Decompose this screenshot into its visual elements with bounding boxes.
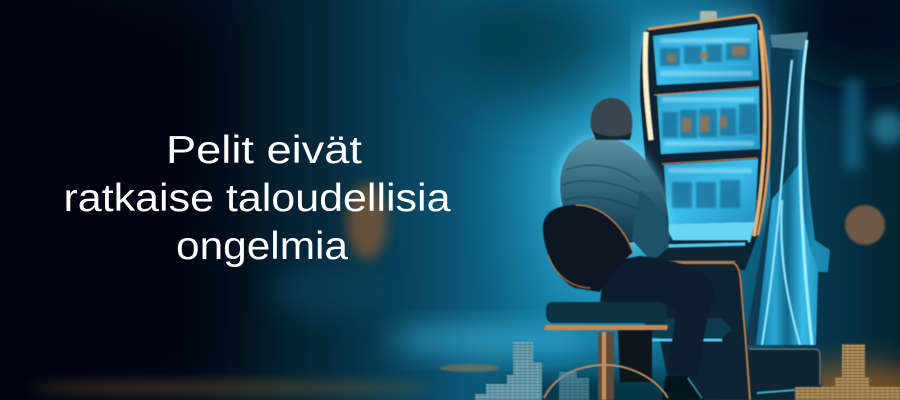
rim glow	[558, 136, 669, 245]
chip stacks	[475, 342, 900, 400]
screen details	[660, 42, 757, 208]
stool seat	[546, 302, 667, 323]
stool foot ring	[544, 365, 668, 398]
head	[591, 98, 632, 138]
gold frame edges	[648, 15, 770, 235]
title: Pelit eivät	[166, 129, 362, 172]
machine lower cabinet	[660, 262, 750, 400]
machine frame	[640, 15, 770, 270]
man at machine	[558, 98, 713, 400]
machine glass body	[756, 160, 818, 345]
stool back	[543, 205, 633, 292]
title: ratkaise taloudellisia	[64, 177, 451, 220]
title	[64, 129, 451, 268]
right chips	[795, 344, 900, 400]
slot machine	[640, 11, 830, 400]
machine side body	[745, 32, 830, 345]
lower far leg	[618, 330, 652, 382]
title: ongelmia	[176, 225, 348, 268]
machine console	[665, 240, 748, 280]
stool pole	[598, 332, 614, 400]
trousers	[600, 256, 713, 375]
left chips	[475, 342, 542, 400]
bokeh lights	[30, 111, 900, 400]
bar stool	[543, 205, 668, 400]
machine halo	[641, 15, 775, 220]
back chips	[559, 372, 589, 400]
shirt	[560, 136, 669, 245]
shoe	[662, 376, 700, 400]
top lamp	[700, 11, 717, 21]
screen panels	[653, 24, 760, 242]
